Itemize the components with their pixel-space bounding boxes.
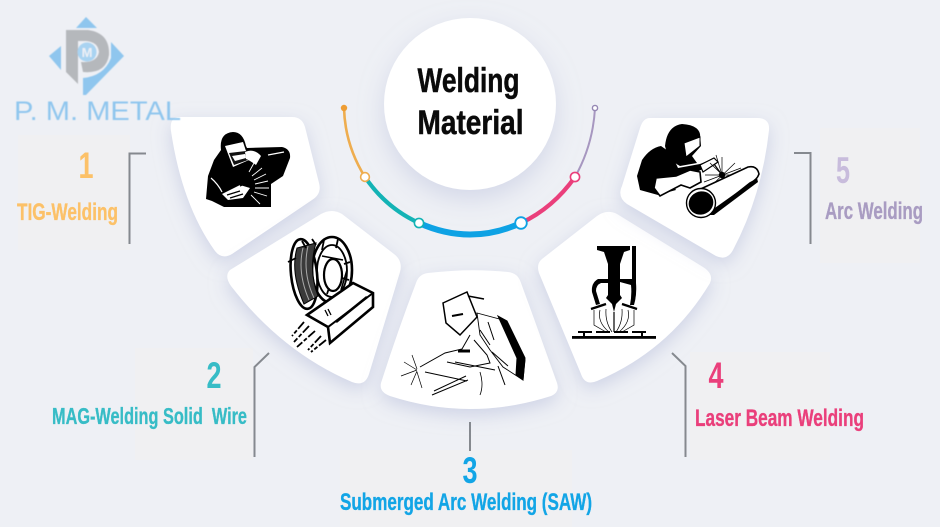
callout: 4 Laser Beam Welding: 4	[708, 355, 724, 396]
panel: TIG-Welding card	[171, 117, 320, 256]
panel: Laser Beam Welding card	[538, 212, 711, 382]
panel: Arc Welding card	[620, 118, 769, 258]
callout: 1 TIG-Welding: TIG-Welding	[17, 199, 118, 226]
callout: 4 Laser Beam Welding	[672, 353, 864, 457]
callout: 3 Submerged Arc Welding	[340, 422, 592, 516]
callout: 5 Arc Welding: 5	[836, 150, 850, 191]
icon: TIG welder	[206, 132, 290, 207]
logo: P. M. Metal: P. M. METAL	[14, 96, 181, 126]
callout: 2 MAG-Welding Solid Wire: MAG-Welding Solid Wire	[52, 403, 247, 429]
icon: arc welder with pipe	[637, 124, 759, 219]
callout: 2 MAG-Welding Solid Wire: 2	[206, 355, 222, 396]
arc timeline	[341, 105, 598, 234]
panel: MAG-Welding card	[227, 211, 401, 383]
callout: 4 Laser Beam Welding: Laser Beam Welding	[695, 405, 864, 432]
center circle	[384, 18, 556, 190]
title: Welding	[418, 62, 520, 100]
icon: laser welding head	[572, 246, 656, 339]
panel: Submerged Arc Welding card	[381, 270, 558, 409]
icon: welder with torch	[401, 292, 525, 395]
icon: wire spool	[287, 237, 373, 352]
callout: 2 MAG-Welding Solid Wire	[52, 353, 269, 457]
callout: 3 Submerged Arc Welding: Submerged Arc Welding (SAW)	[340, 489, 592, 516]
title: Material	[418, 104, 524, 142]
callout: 1 TIG-Welding	[17, 145, 146, 244]
logo: P. M. Metal: M	[82, 45, 92, 60]
logo: P. M. Metal	[14, 17, 181, 126]
callout: 3 Submerged Arc Welding: 3	[462, 450, 478, 491]
title	[418, 62, 524, 142]
callout: 1 TIG-Welding: 1	[78, 145, 94, 186]
callout: 5 Arc Welding	[794, 150, 923, 244]
